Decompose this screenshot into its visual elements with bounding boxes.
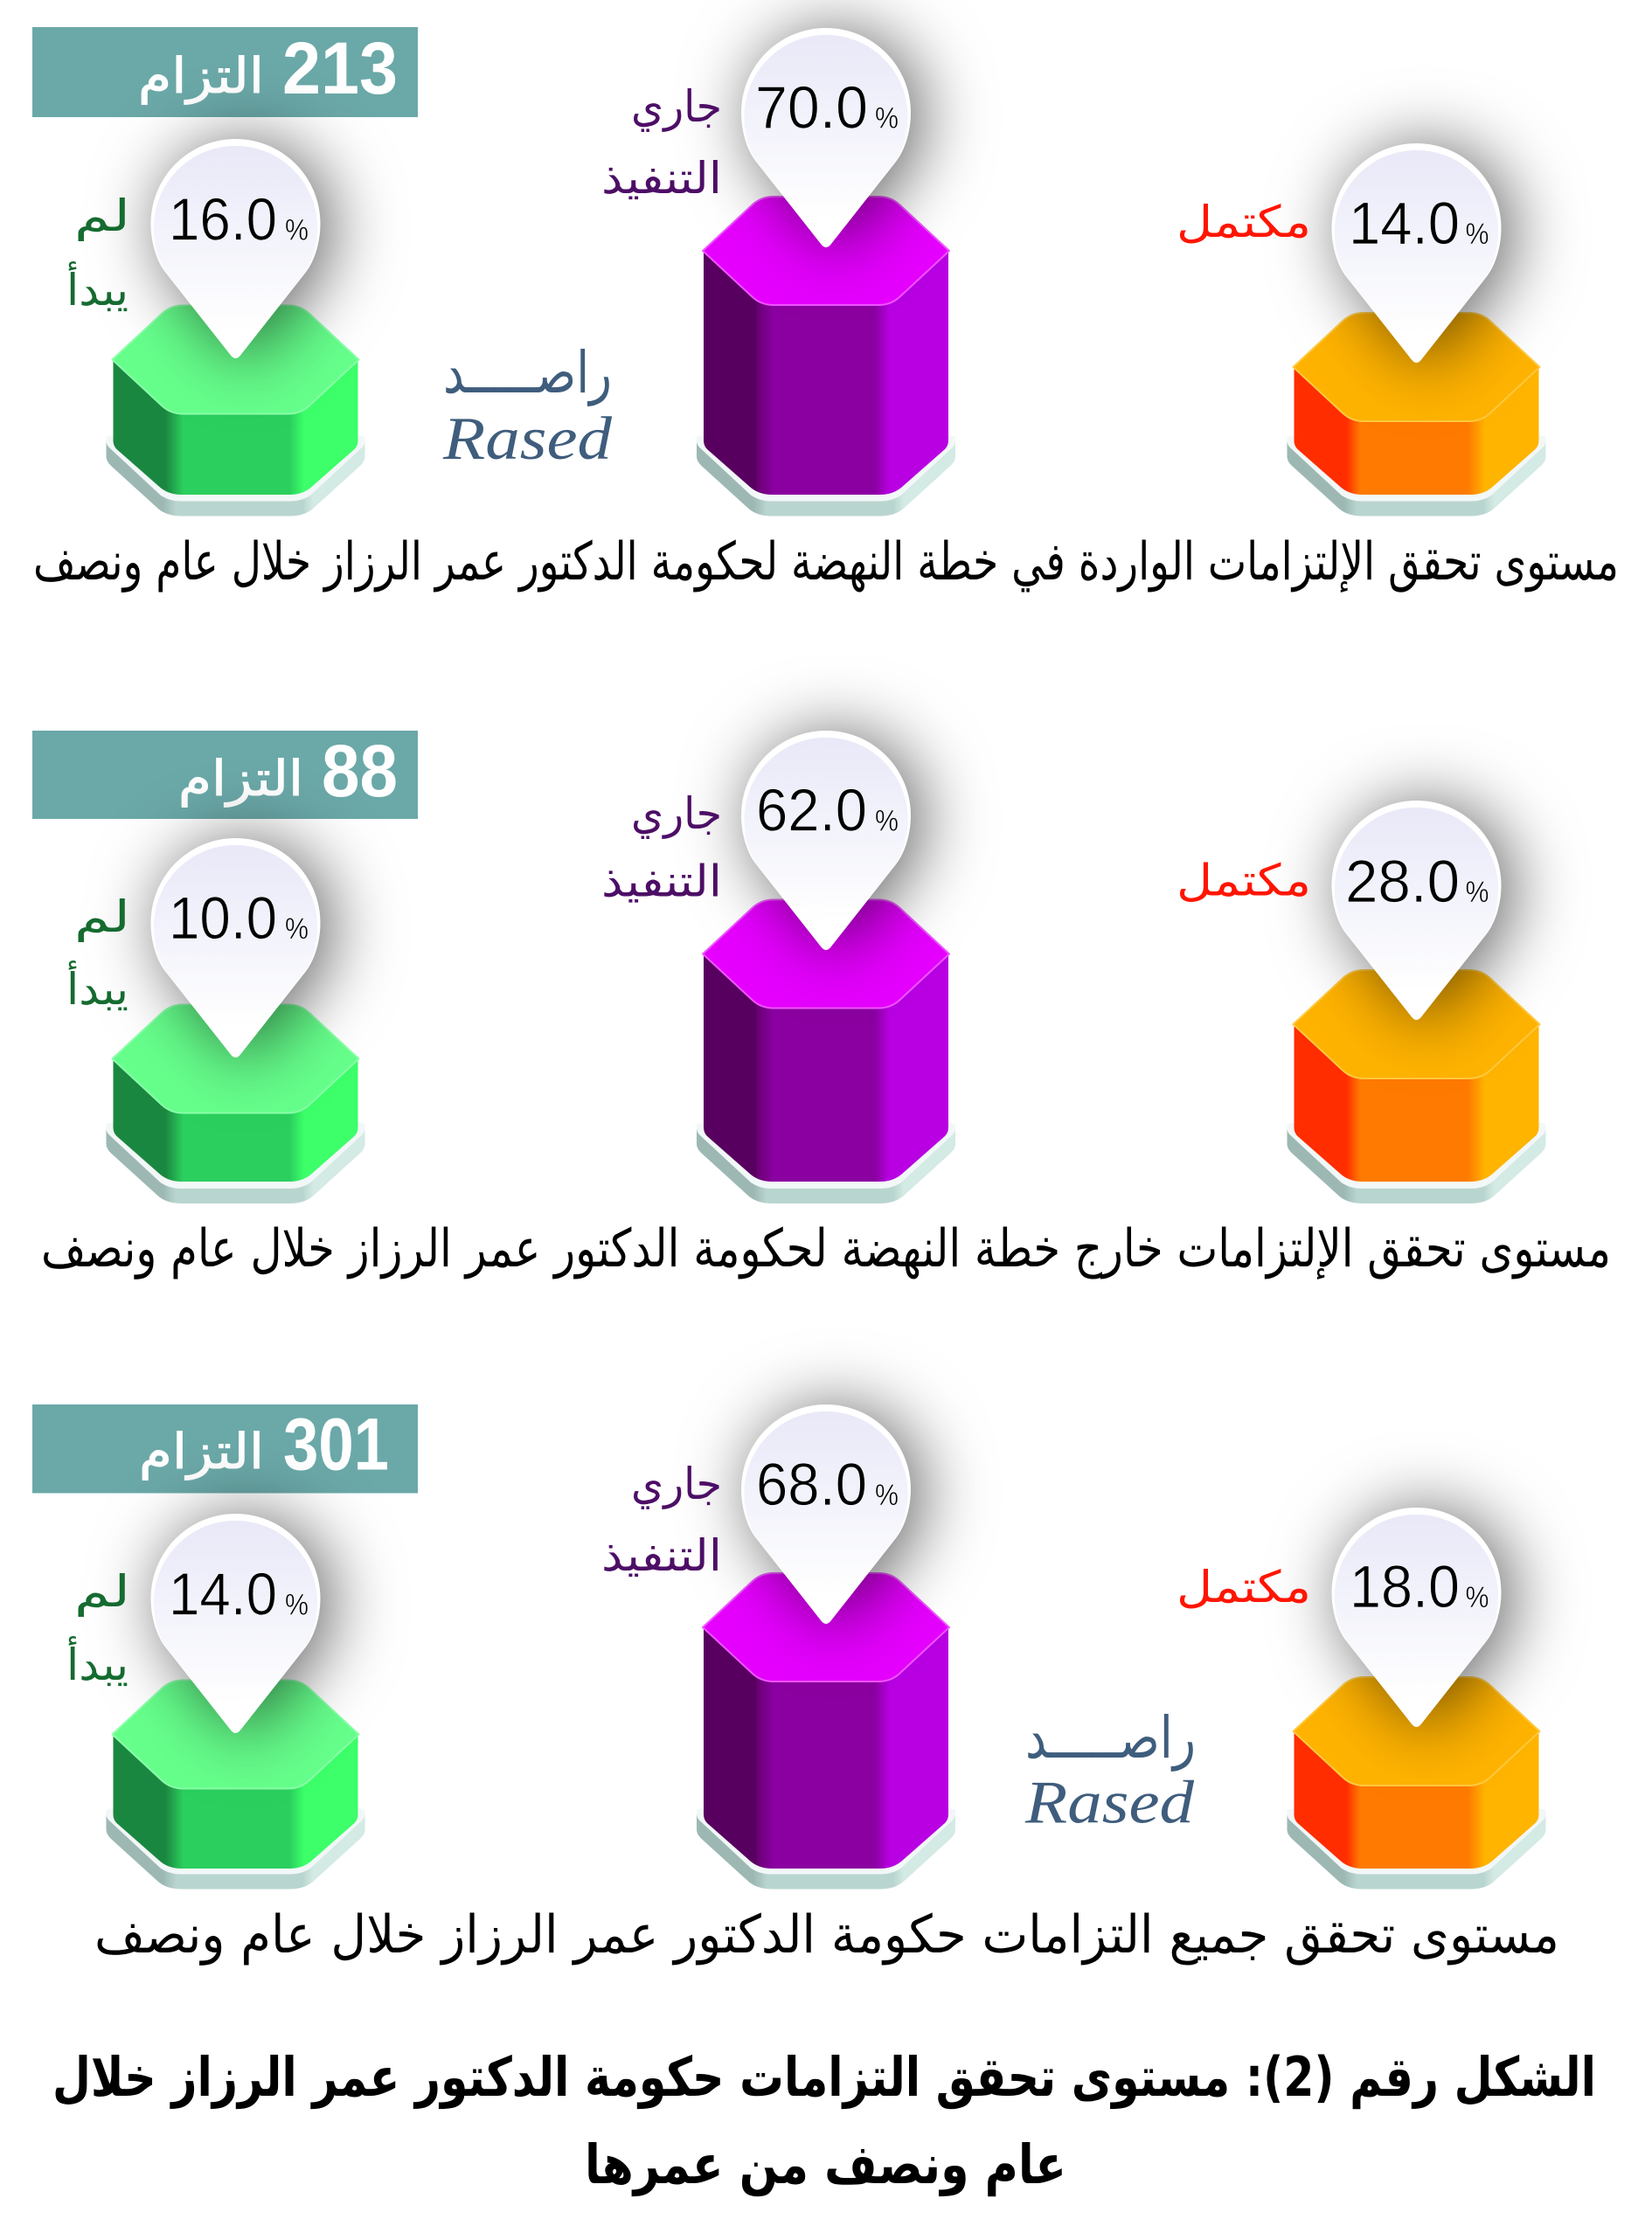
pin: 62.0 percent: % [875,804,899,837]
label: not started: لم [74,191,130,241]
pin: 68.0 percent [741,1404,911,1624]
label: not started: يبدأ [66,1636,128,1690]
pin: 28.0 percent [1332,801,1502,1020]
pin: 18.0 percent: 18.0 [1350,1553,1460,1620]
label: in progress: التنفيذ [601,856,722,907]
pin: 14.0 percent: % [285,1589,309,1622]
label: in progress: جاري [631,81,722,132]
logo: Rased: Rased [1024,1769,1195,1837]
bar: not started green [107,1680,365,1890]
bar: completed orange [1287,313,1545,516]
pin: 62.0 percent [741,731,911,950]
pin: 10.0 percent [150,838,320,1057]
pin: 62.0 percent: 62.0 [756,776,867,844]
label: in progress [601,81,722,204]
label: not started [66,191,130,316]
pin: 16.0 percent [150,139,320,358]
figure title: عام ونصف من عمرها [585,2132,1066,2197]
banner: 213 commitments: التزام [138,48,264,105]
pin: 10.0 percent: % [285,912,309,946]
logo: Rased [442,339,613,473]
pin: 68.0 percent: 68.0 [756,1451,867,1518]
panel: row 1 commitments in the plan [32,27,1619,593]
pin: 10.0 percent: 10.0 [169,884,277,952]
banner: 88 commitments: التزام [178,751,303,808]
pin: 70.0 percent: % [875,101,899,135]
pin: 14.0 percent: % [1465,218,1489,251]
bar: in progress purple [697,900,955,1203]
banner: 301 commitments: التزام [139,1424,264,1480]
logo: Rased: Rased [442,406,613,473]
figure title: الشكل رقم (2): مستوى تحقق التزامات حكومة الدكتور عمر الرزاز خلال [52,2045,1596,2109]
label: completed: مكتمل [1177,1562,1311,1612]
bar: not started green [107,306,365,516]
logo: Rased: راصـــــد [1025,1704,1196,1772]
label: in progress [601,1459,722,1581]
bar: in progress purple [697,197,955,516]
pin: 18.0 percent [1332,1508,1502,1727]
pin: 16.0 percent: % [285,213,309,246]
pin: 18.0 percent: % [1465,1581,1489,1614]
pin: 28.0 percent: 28.0 [1345,848,1460,915]
panel: row 2 commitments outside the plan [32,730,1611,1279]
pin: 14.0 percent: 14.0 [169,1561,277,1627]
pin: 68.0 percent: % [875,1479,899,1512]
label: completed: مكتمل [1177,197,1311,247]
pin: 70.0 percent: 70.0 [755,73,868,142]
label: in progress: التنفيذ [601,1530,722,1581]
pin: 14.0 percent [150,1514,320,1733]
logo: Rased [1024,1704,1196,1837]
label: not started: لم [74,891,130,942]
panel: row 3 all commitments [32,1404,1559,1966]
label: in progress: التنفيذ [601,153,722,204]
banner: 88 commitments [32,730,418,819]
pin: 28.0 percent: % [1465,876,1489,909]
label: not started: يبدأ [66,960,128,1015]
label: in progress: جاري [631,1459,722,1509]
label: not started: يبدأ [66,261,128,316]
bar: in progress purple [697,1573,955,1890]
banner: 213 commitments [32,27,418,117]
label: in progress: جاري [631,788,722,839]
banner: 213 commitments: 213 [282,27,398,109]
label: not started [66,891,130,1015]
caption row 3: مستوى تحقق جميع التزامات حكومة الدكتور عمر الرزاز خلال عام ونصف [94,1904,1559,1966]
logo: Rased: راصـــــد [443,339,612,406]
label: completed: مكتمل [1177,855,1311,905]
bar: not started green [107,1005,365,1203]
label: not started [66,1566,130,1690]
pin: 16.0 percent: 16.0 [169,185,277,253]
bar: completed orange [1287,1677,1545,1890]
figure title [52,2045,1596,2197]
label: in progress [601,788,722,907]
label: not started: لم [74,1566,130,1617]
bar: completed orange [1287,970,1545,1203]
pin: 70.0 percent [741,28,911,247]
banner: 301 commitments [32,1404,418,1493]
pin: 14.0 percent [1332,143,1502,363]
banner: 88 commitments: 88 [322,730,398,812]
banner: 301 commitments: 301 [283,1404,389,1486]
pin: 14.0 percent: 14.0 [1349,190,1460,257]
